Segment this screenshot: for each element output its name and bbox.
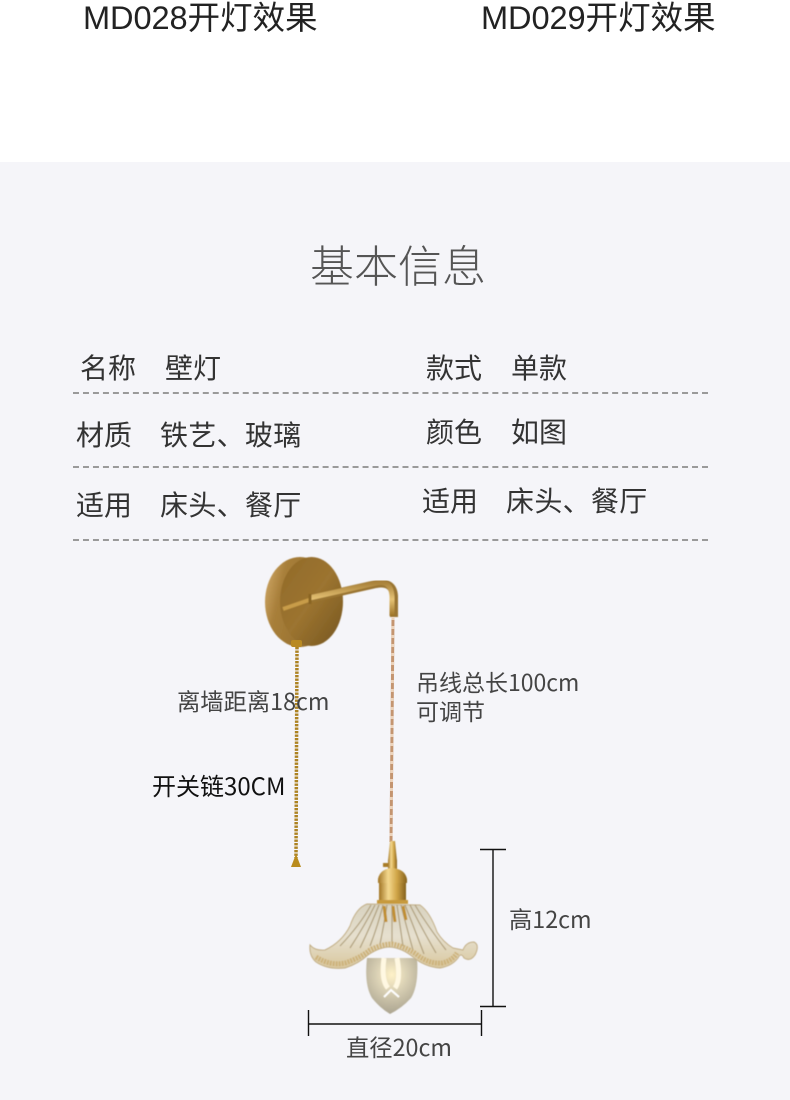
label: diameter: 直径20cm bbox=[346, 1029, 452, 1063]
heading: basic information: 基本信息 bbox=[310, 231, 486, 295]
label: cord length: 可调节 bbox=[416, 693, 485, 727]
arrow: diameter dimension bbox=[308, 1010, 482, 1036]
label: switch chain: 开关链30CM bbox=[152, 767, 285, 802]
icon: brass lamp socket bbox=[377, 841, 408, 904]
icon: lamp arm bbox=[283, 583, 394, 617]
label: cord length: 吊线总长100cm bbox=[416, 664, 579, 698]
caption: MD029 lit effect: MD029开灯效果 bbox=[481, 0, 715, 36]
icon: pull chain bbox=[291, 640, 302, 867]
spec: style: 款式 单款 bbox=[426, 347, 567, 387]
label: cord length bbox=[416, 664, 579, 727]
arrow: height dimension bbox=[480, 850, 506, 1006]
spec: colour: 颜色 如图 bbox=[426, 411, 567, 451]
icon: fluted glass shade bbox=[310, 904, 477, 968]
spec: usage left: 适用 床头、餐厅 bbox=[76, 484, 302, 524]
icon: light bulb bbox=[366, 958, 417, 1014]
caption: MD028 lit effect: MD028开灯效果 bbox=[83, 0, 317, 36]
spec: usage right: 适用 床头、餐厅 bbox=[422, 480, 648, 520]
label: distance from wall: 离墙距离18cm bbox=[177, 683, 330, 717]
spec: material: 材质 铁艺、玻璃 bbox=[76, 414, 302, 454]
icon: hanging cord bbox=[391, 617, 393, 842]
icon: wall plate bbox=[265, 557, 343, 647]
label: height: 高12cm bbox=[509, 901, 592, 935]
spec: name: 名称 壁灯 bbox=[80, 347, 221, 387]
